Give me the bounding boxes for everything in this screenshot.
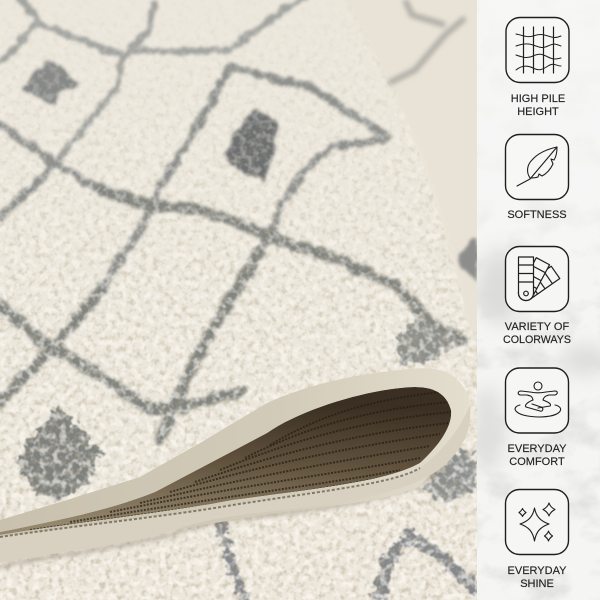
rug binding edge, lower fold bbox=[0, 405, 470, 563]
label: variety of colorways: VARIETY OF bbox=[505, 321, 569, 333]
panel marble texture bbox=[477, 240, 600, 600]
feature: softness bbox=[506, 134, 568, 221]
floor rug, lower section bbox=[0, 430, 477, 600]
label: high pile height: HIGH PILE bbox=[511, 93, 565, 105]
pile texture speckle bbox=[0, 0, 477, 600]
label: high pile height: HEIGHT bbox=[517, 106, 559, 118]
feature: variety of colorways bbox=[503, 246, 571, 346]
binding shadow on floor rug bbox=[0, 468, 445, 566]
label: softness: SOFTNESS bbox=[507, 209, 567, 221]
grey tuft near roll edge bbox=[395, 318, 458, 366]
label: everyday comfort: COMFORT bbox=[509, 456, 565, 468]
rug underside, dark backing bbox=[0, 387, 451, 535]
background rug lines, top right bbox=[385, 0, 465, 85]
side panel bbox=[472, 0, 600, 600]
icon: pile fibres bbox=[506, 18, 569, 82]
rolled rug pile, cream surface bbox=[382, 79, 391, 90]
diamond motif, upper left bbox=[22, 61, 78, 105]
icon: sparkles bbox=[506, 490, 568, 554]
floor rug grey patch, right bbox=[425, 448, 476, 503]
label: everyday shine: SHINE bbox=[520, 578, 554, 590]
icon: feather bbox=[506, 134, 568, 200]
icon: colour fan deck bbox=[506, 246, 568, 312]
feature: everyday shine bbox=[506, 490, 568, 590]
rug photograph bbox=[0, 0, 477, 600]
floor rug grey patterns bbox=[220, 522, 477, 600]
label: everyday comfort: EVERYDAY bbox=[508, 443, 567, 455]
lattice pattern, grey lines bbox=[0, 0, 462, 440]
background rug grey patch, right bbox=[458, 238, 477, 282]
diamond motif, lower left bbox=[16, 408, 102, 499]
label: everyday shine: EVERYDAY bbox=[508, 565, 567, 577]
rug binding edge, top fold bbox=[0, 368, 470, 537]
binding stitch shading bbox=[0, 468, 420, 537]
feature: high pile height bbox=[506, 18, 569, 118]
diamond motif, centre bbox=[224, 108, 277, 180]
label: variety of colorways: COLORWAYS bbox=[503, 334, 571, 346]
feature: everyday comfort bbox=[506, 368, 568, 468]
icon: meditating figure bbox=[506, 368, 568, 433]
